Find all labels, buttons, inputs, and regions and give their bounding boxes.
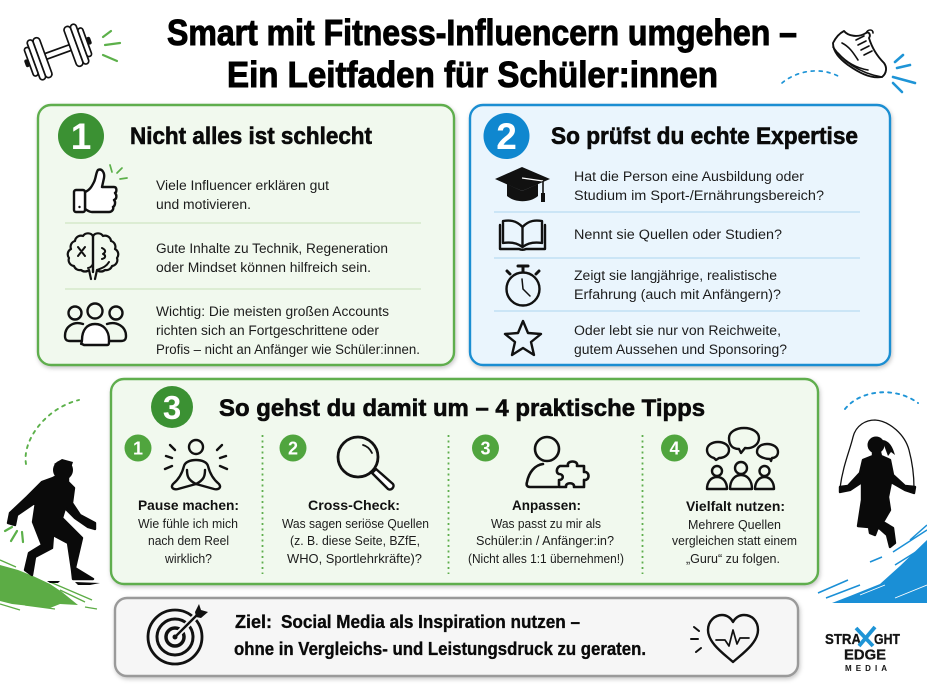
- logo: Straight Edge Media: MEDIA: [845, 664, 887, 673]
- icon: magnifying glass: [338, 437, 394, 490]
- text: Nennt sie Quellen oder Studien?: [574, 227, 782, 242]
- icon: graduation cap: [495, 167, 550, 202]
- panel: Nicht alles ist schlecht: [38, 105, 454, 365]
- text: Anpassen:: [512, 497, 581, 513]
- icon: dumbbell: [18, 20, 120, 84]
- tip 3: Anpassen: [468, 434, 624, 566]
- icon: stopwatch: [506, 266, 540, 306]
- figure: girl jumping rope: [840, 392, 918, 547]
- text: Erfahrung (auch mit Anfängern)?: [574, 287, 781, 302]
- text: [574, 323, 787, 357]
- tip 1: Pause machen: [124, 434, 239, 566]
- text: Vielfalt nutzen:: [686, 498, 785, 514]
- icon: group of people: [65, 304, 126, 345]
- text: Zeigt sie langjährige, realistische: [574, 268, 777, 283]
- text: Viele Influencer erklären gut: [156, 178, 329, 193]
- logo: Straight Edge Media: [825, 627, 900, 673]
- text: [138, 497, 239, 566]
- logo: Straight Edge Media: STRA: [825, 631, 861, 648]
- text: (z. B. diese Seite, BZfE,: [290, 534, 420, 548]
- text: nach dem Reel: [148, 534, 229, 548]
- icon: people with speech bubbles: [707, 428, 778, 489]
- badge: 3: [480, 438, 491, 458]
- icon: meditation: [165, 440, 227, 489]
- green paint swoosh: [0, 560, 97, 610]
- badge: 1: [133, 438, 143, 458]
- text: (Nicht alles 1:1 übernehmen!): [468, 552, 624, 566]
- text: [574, 169, 824, 203]
- blue paint swoosh: [818, 525, 927, 603]
- heading: Nicht alles ist schlecht: [130, 123, 372, 150]
- text: [574, 268, 781, 302]
- text: Profis – nicht an Anfänger wie Schüler:innen.: [156, 342, 420, 357]
- text: Studium im Sport-/Ernährungsbereich?: [574, 188, 824, 203]
- tip 2: Cross-Check: [280, 434, 429, 566]
- icon: heart with pulse: [691, 615, 758, 662]
- heading: So prüfst du echte Expertise: [551, 123, 858, 150]
- text: [156, 178, 329, 212]
- text: gutem Aussehen und Sponsoring?: [574, 342, 787, 357]
- icon: open book: [500, 221, 545, 250]
- text: Wie fühle ich mich: [138, 517, 238, 531]
- logo: Straight Edge Media: EDGE: [844, 646, 886, 664]
- text: Pause machen:: [138, 497, 239, 513]
- panel: Ziel: [115, 598, 798, 676]
- text: wirklich?: [164, 552, 212, 566]
- text: Wichtig: Die meisten großen Accounts: [156, 304, 389, 319]
- title: Smart mit Fitness-Influencern umgehen –: [167, 12, 797, 53]
- icon: star: [505, 321, 541, 355]
- icon: target with arrow: [148, 604, 208, 664]
- text: [672, 498, 797, 566]
- text: „Guru“ zu folgen.: [686, 552, 780, 566]
- text: [156, 241, 388, 275]
- text: Social Media als Inspiration nutzen –: [281, 612, 580, 632]
- icon: brain: [68, 233, 118, 279]
- number badge 1: 1: [71, 116, 91, 157]
- number badge 2: 2: [496, 116, 517, 157]
- badge: [280, 434, 306, 462]
- icon: running shoe: [782, 30, 915, 92]
- badge: 4: [669, 438, 680, 458]
- text: ohne in Vergleichs- und Leistungsdruck zu geraten.: [234, 639, 646, 659]
- text: [234, 612, 646, 659]
- text: Gute Inhalte zu Technik, Regeneration: [156, 241, 388, 256]
- icon: person with puzzle piece: [527, 437, 588, 487]
- text: richten sich an Fortgeschrittene oder: [156, 323, 379, 338]
- icon: thumbs up: [74, 165, 127, 212]
- number badge 2: [484, 113, 530, 159]
- text: [156, 304, 420, 357]
- figure: running athlete: [5, 400, 100, 585]
- text: Cross-Check:: [308, 497, 400, 513]
- panel: So prüfst du echte Expertise: [470, 105, 890, 365]
- panel: 4 praktische Tipps: [111, 379, 818, 584]
- text: Was passt zu mir als: [491, 517, 601, 531]
- text: Oder lebt sie nur von Reichweite,: [574, 323, 781, 338]
- tip 4: Vielfalt nutzen: [661, 428, 797, 566]
- text: WHO, Sportlehrkräfte)?: [287, 552, 422, 566]
- number badge 3: 3: [163, 389, 181, 426]
- text: Was sagen seriöse Quellen: [282, 517, 429, 531]
- text: Ziel:: [235, 612, 272, 632]
- text: Schüler:in / Anfänger:in?: [476, 534, 614, 548]
- badge: [472, 434, 499, 462]
- number badge 1: [58, 113, 104, 159]
- text: und motivieren.: [156, 197, 251, 212]
- text: [282, 497, 429, 566]
- text: [468, 497, 624, 566]
- heading: So gehst du damit um – 4 praktische Tipps: [219, 395, 705, 422]
- logo: Straight Edge Media: GHT: [874, 631, 900, 648]
- text: oder Mindset können hilfreich sein.: [156, 260, 371, 275]
- title: Ein Leitfaden für Schüler:innen: [227, 54, 718, 95]
- title: [167, 12, 797, 95]
- badge: 2: [288, 438, 298, 458]
- text: Mehrere Quellen: [688, 518, 781, 532]
- text: Hat die Person eine Ausbildung oder: [574, 169, 805, 184]
- text: vergleichen statt einem: [672, 534, 797, 548]
- number badge 3: [151, 386, 193, 428]
